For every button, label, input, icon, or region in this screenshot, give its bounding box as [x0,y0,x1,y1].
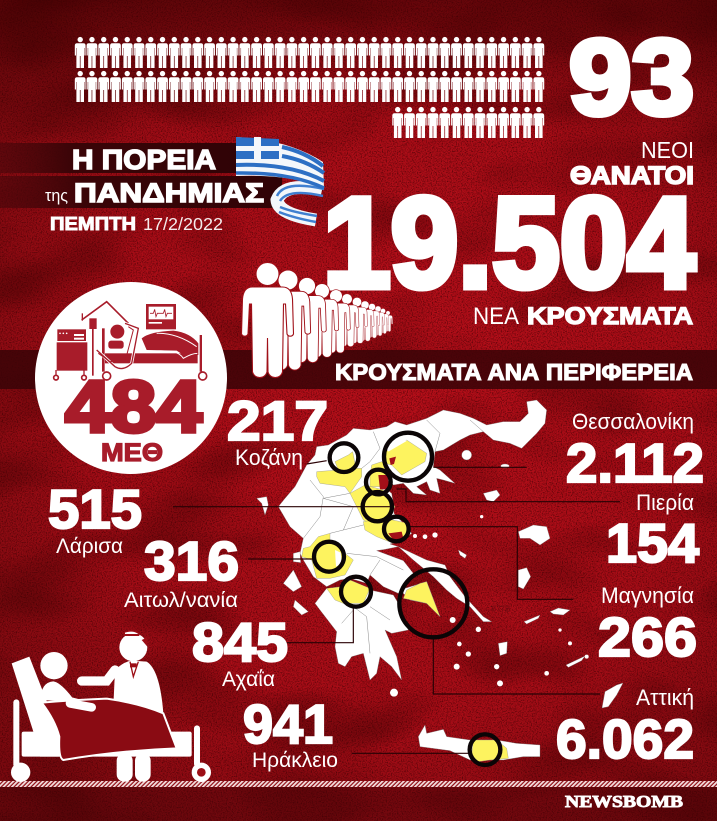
leader lines [173,461,620,753]
region borders [303,420,483,653]
date: ΠΕΜΠΤΗ [50,214,136,234]
title banner: Η ΠΟΡΕΙΑ [72,144,216,175]
logo: Newsbomb: NEWSBOMB [565,792,683,811]
region: Κοζάνη: Κοζάνη [235,445,303,470]
region: Ηράκλειο: 941 [243,693,333,755]
cases label: ΝΕΑ [473,303,519,330]
pictogram: 93 deaths as people [75,37,544,138]
region: Θεσσαλονίκη: Θεσσαλονίκη [572,409,694,434]
hatched footer line [0,781,717,787]
title banner: της [45,186,68,205]
deaths figure: 93 [569,17,694,137]
region: Αττική: 6.062 [556,708,694,770]
date: 17/2/2022 [143,214,223,234]
deaths label: ΝΕΟΙ [641,137,694,163]
region: Αιτωλ/νανία: 316 [144,530,239,592]
date [50,214,223,234]
icon: ICU bed [54,302,207,380]
highlighted regions [302,440,508,762]
map details cut back to sea [353,457,403,588]
region: Πιερία: 154 [606,512,699,574]
region circles [314,433,500,765]
region: Αιτωλ/νανία [124,530,239,612]
region: Μαγνησία: Μαγνησία [601,583,694,608]
region: Λάρισα: 515 [48,478,142,540]
panel: ICU circle [35,282,227,474]
mainland and islands [257,400,623,760]
icon: Greek flag ribbon [236,137,324,222]
title banner: ΠΑΝΔΗΜΙΑΣ [74,178,264,208]
region: Πιερία: Πιερία [636,490,694,515]
map of Greece [173,400,623,765]
cases label [473,303,693,330]
white patches inside highlighted regions [335,440,407,567]
region: Αττική: Αττική [636,685,694,710]
deaths label: ΘΑΝΑΤΟΙ [570,162,694,190]
icon: queue of people [242,262,393,378]
deaths label [570,137,694,190]
ICU label: ΜΕΘ [101,439,163,467]
region: Λάρισα: Λάρισα [56,535,123,558]
cases label: ΚΡΟΥΣΜΑΤΑ [527,303,693,330]
region: Μαγνησία [598,583,697,668]
region: Αχαΐα: Αχαΐα [222,668,275,691]
regional band: ΚΡΟΥΣΜΑΤΑ ΑΝΑ ΠΕΡΙΦΕΡΕΙΑ [335,359,693,385]
map code label: 677B [492,604,510,613]
region: Κοζάνη: 217 [227,389,328,452]
region: Αχαΐα: 845 [192,611,288,673]
region: Θεσσαλονίκη: 2.112 [566,432,704,494]
title banner [0,143,282,208]
region: Ηράκλειο: Ηράκλειο [252,749,338,772]
region: Αιτωλ/νανία: Αιτωλ/νανία [124,589,238,612]
region: Μαγνησία: 266 [598,606,697,668]
icon: doctor and patient [11,630,211,782]
regional band [0,350,717,389]
ICU figure: 484 [65,367,202,448]
cases figure: 19.504 [323,172,695,315]
